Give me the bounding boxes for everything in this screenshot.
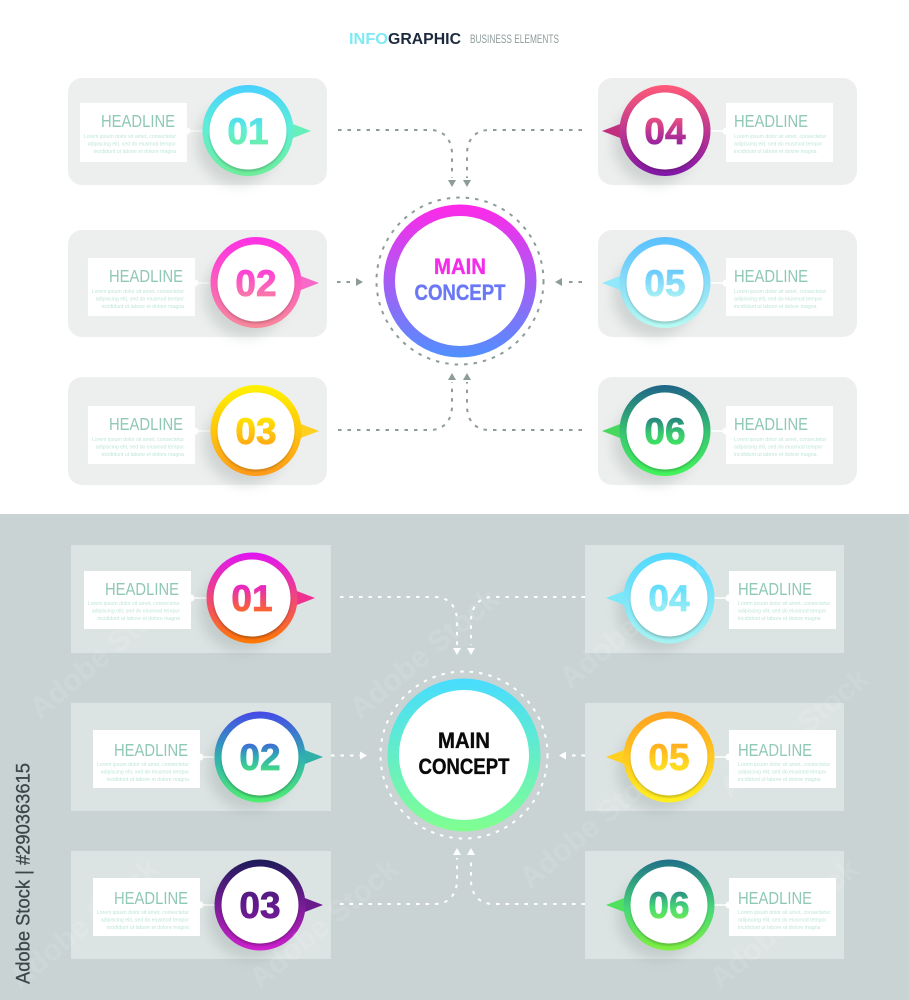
top panel 04: HEADLINE	[734, 111, 808, 131]
top panel 03: adipiscing elit, sed do eiusmod tempor	[96, 444, 184, 450]
watermark text: Adobe Stock	[553, 552, 715, 695]
top panel 01: 01	[227, 111, 269, 152]
top panel 02: Lorem ipsum dolor sit amet, consectetur	[92, 289, 184, 295]
bottom panel 01	[71, 545, 331, 653]
bottom panel 06: adipiscing elit, sed do eiusmod tempor	[738, 918, 827, 924]
bottom panel 04: HEADLINE	[738, 579, 812, 599]
bottom panel 05: incididunt ut labore et dolore magna	[738, 777, 821, 783]
top panel 06: incididunt ut labore et dolore magna	[734, 452, 817, 458]
bottom panel 03	[71, 851, 331, 959]
title: GRAPHIC	[388, 31, 461, 48]
top panel 02: HEADLINE	[109, 266, 183, 286]
bottom panel 03: HEADLINE	[114, 888, 188, 908]
top panel 03: Lorem ipsum dolor sit amet, consectetur	[92, 437, 184, 443]
top panel 04: incididunt ut labore et dolore magna	[734, 149, 817, 155]
bottom panel 05: adipiscing elit, sed do eiusmod tempor	[738, 770, 827, 776]
bottom panel 01: 01	[231, 578, 273, 619]
bottom panel 03: adipiscing elit, sed do eiusmod tempor	[101, 918, 189, 924]
top main concept circle: MAIN	[434, 254, 486, 279]
top panel 06: adipiscing elit, sed do eiusmod tempor	[734, 444, 823, 450]
watermark text	[3, 552, 875, 995]
top panel 06: HEADLINE	[734, 414, 808, 434]
bottom panel 05: Lorem ipsum dolor sit amet, consectetur	[738, 762, 831, 768]
watermark text: Adobe Stock	[703, 852, 865, 995]
top panel 04: Lorem ipsum dolor sit amet, consectetur	[734, 134, 827, 140]
top panel 03: incididunt ut labore et dolore magna	[102, 452, 184, 458]
watermark text: Adobe Stock	[243, 852, 405, 995]
title	[349, 31, 559, 48]
top panel 02: adipiscing elit, sed do eiusmod tempor	[96, 296, 184, 302]
top panel 05	[598, 230, 857, 337]
stock id vertical text: Adobe Stock | #290363615	[14, 763, 34, 984]
bottom panel 02: incididunt ut labore et dolore magna	[107, 777, 189, 783]
top panel 02: 02	[235, 263, 277, 304]
top panel 01	[68, 78, 327, 185]
bottom panel 03: Lorem ipsum dolor sit amet, consectetur	[97, 910, 189, 916]
watermark text: Adobe Stock	[713, 662, 875, 805]
title: BUSINESS ELEMENTS	[470, 32, 559, 46]
bottom panel 05	[585, 703, 844, 811]
bottom panel 02: 02	[239, 737, 281, 778]
bottom panel 02	[71, 703, 331, 811]
bottom panel 06	[585, 851, 844, 959]
bottom panel 01: incididunt ut labore et dolore magna	[98, 616, 180, 622]
watermark text: Adobe Stock	[3, 852, 165, 995]
top panel 05: Lorem ipsum dolor sit amet, consectetur	[734, 289, 827, 295]
top panel 05: 05	[644, 263, 686, 304]
bottom connectors and arrows	[331, 597, 585, 904]
bottom panel 06: Lorem ipsum dolor sit amet, consectetur	[738, 910, 831, 916]
top panel 01: HEADLINE	[101, 111, 175, 131]
top panel 01: incididunt ut labore et dolore magna	[94, 149, 176, 155]
bottom main concept circle	[380, 672, 548, 838]
top panel 06: 06	[644, 411, 686, 452]
top connectors and arrows	[337, 130, 582, 430]
watermark text: Adobe Stock	[513, 752, 675, 895]
bottom panel 03: 03	[239, 885, 281, 926]
title: INFO	[349, 31, 388, 48]
bottom panel 05: 05	[648, 737, 690, 778]
bottom panel 02: Lorem ipsum dolor sit amet, consectetur	[97, 762, 189, 768]
bottom main concept circle: CONCEPT	[418, 754, 510, 779]
bottom panel 03: incididunt ut labore et dolore magna	[107, 925, 189, 931]
top panel 06: Lorem ipsum dolor sit amet, consectetur	[734, 437, 827, 443]
bottom main concept circle: MAIN	[438, 728, 490, 753]
top panel 03: HEADLINE	[109, 414, 183, 434]
top panel 06	[598, 377, 857, 485]
bottom panel 01: HEADLINE	[105, 579, 179, 599]
top main concept circle: CONCEPT	[414, 280, 506, 305]
bottom panel 02: HEADLINE	[114, 740, 188, 760]
top main concept circle	[376, 198, 544, 364]
top panel 05: adipiscing elit, sed do eiusmod tempor	[734, 296, 823, 302]
bottom panel 04: incididunt ut labore et dolore magna	[738, 616, 821, 622]
top panel 04: 04	[644, 111, 686, 152]
lower section background	[0, 514, 909, 1000]
bottom panel 06: HEADLINE	[738, 888, 812, 908]
bottom panel 01: Lorem ipsum dolor sit amet, consectetur	[88, 601, 180, 607]
bottom panel 04: adipiscing elit, sed do eiusmod tempor	[738, 608, 827, 614]
watermark text: Adobe Stock	[23, 582, 185, 725]
bottom panel 06: incididunt ut labore et dolore magna	[738, 925, 821, 931]
top panel 05: HEADLINE	[734, 266, 808, 286]
top panel 01: adipiscing elit, sed do eiusmod tempor	[88, 142, 176, 148]
top panel 01: Lorem ipsum dolor sit amet, consectetur	[84, 134, 176, 140]
bottom panel 01: adipiscing elit, sed do eiusmod tempor	[92, 608, 180, 614]
bottom panel 04: Lorem ipsum dolor sit amet, consectetur	[738, 601, 831, 607]
top panel 04: adipiscing elit, sed do eiusmod tempor	[734, 142, 823, 148]
top panel 03: 03	[235, 411, 277, 452]
watermark text: Adobe Stock	[343, 582, 505, 725]
top panel 04	[598, 78, 857, 185]
bottom panel 04	[585, 545, 844, 653]
top panel 05: incididunt ut labore et dolore magna	[734, 304, 817, 310]
bottom panel 02: adipiscing elit, sed do eiusmod tempor	[101, 770, 189, 776]
top panel 02: incididunt ut labore et dolore magna	[102, 304, 184, 310]
bottom panel 05: HEADLINE	[738, 740, 812, 760]
bottom panel 04: 04	[648, 578, 690, 619]
top panel 03	[68, 377, 327, 485]
top panel 02	[68, 230, 327, 337]
bottom panel 06: 06	[648, 885, 690, 926]
